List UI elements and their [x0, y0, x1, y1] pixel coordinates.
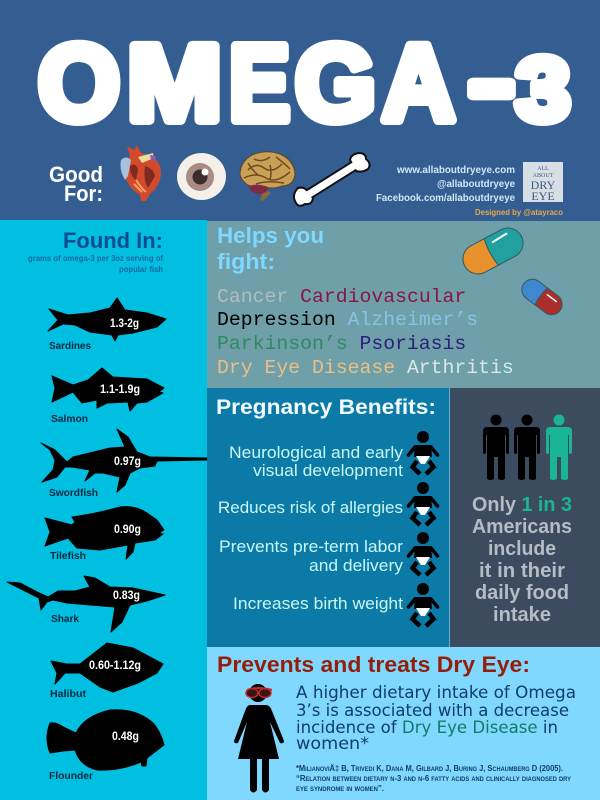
fish: salmon: [51, 368, 164, 425]
heading: found in: Found In:: [63, 228, 163, 253]
panel: pregnancy benefits: [207, 388, 449, 647]
credit: Designed by @atayraco: [475, 207, 563, 217]
title: O: [38, 22, 120, 143]
fish: flounder: [47, 710, 164, 782]
subheading: grams of omega-3 per 3oz serving of: [28, 254, 163, 263]
fish: sardines: [48, 298, 166, 352]
fish: sardines: 1.3-2g: [110, 318, 139, 330]
benefit: neurological: [229, 431, 438, 480]
text: citation: *MilianoviÄ‡ B, Trivedi K, Dana M, Gilbard J, Buring J, Schaumberg D (2005).: [296, 764, 563, 773]
title: -: [468, 19, 515, 140]
icon: three people: [483, 414, 572, 480]
fish: halibut: Halibut: [50, 688, 86, 700]
logo: DRY: [531, 178, 556, 192]
fish: shark: 0.83g: [113, 590, 140, 602]
text: paragraph: women*: [296, 734, 369, 754]
panel: helps you fight: [207, 221, 600, 388]
benefit: pre-term: Prevents pre-term labor: [219, 538, 404, 556]
text: paragraph: 3’s is associated with a decrease: [296, 701, 569, 721]
text: links: @allaboutdryeye: [437, 178, 515, 190]
fish: swordfish: [41, 429, 207, 499]
title: A: [382, 22, 455, 143]
panel: dry eye: [207, 647, 600, 800]
benefit: birth weight: Increases birth weight: [233, 595, 403, 613]
text: paragraph: A higher dietary intake of Omega: [296, 683, 576, 703]
text: links: www.allaboutdryeye.com: [396, 164, 515, 176]
fish: salmon: Salmon: [51, 413, 88, 425]
text: citation: eye syndrome in women”.: [296, 784, 384, 793]
panel: 1 in 3 Americans: [449, 388, 600, 647]
text: conditions list: Parkinson’s Psoriasis: [217, 333, 466, 355]
text: citation: [296, 764, 571, 793]
fish: flounder: Flounder: [49, 770, 93, 782]
benefit: neurological: Neurological and early: [229, 444, 404, 462]
heading: good for: Good: [49, 162, 103, 187]
heading: helps you fight: fight:: [217, 249, 275, 274]
benefit: pre-term: and delivery: [309, 557, 404, 575]
text: only 1 in 3: intake: [493, 603, 551, 626]
fish: sardines: Sardines: [49, 340, 91, 352]
title: E: [229, 22, 290, 143]
panel: found in: [0, 220, 207, 800]
fish: halibut: 0.60-1.12g: [89, 660, 141, 672]
benefit: neurological: visual development: [253, 462, 403, 480]
text: links: Facebook.com/allaboutdryeye: [376, 192, 515, 204]
icon: brain: [240, 152, 295, 201]
icon: eye: [177, 153, 226, 200]
text: only 1 in 3: [472, 493, 572, 626]
title: G: [295, 22, 376, 143]
title: M: [127, 22, 222, 143]
panel: header: [0, 0, 600, 221]
fish: shark: Shark: [51, 613, 79, 625]
fish: swordfish: 0.97g: [114, 456, 141, 468]
fish: tilefish: Tilefish: [50, 550, 86, 562]
text: only 1 in 3: Americans: [472, 515, 572, 538]
heading: helps you fight: Helps you: [217, 223, 324, 248]
text: conditions list: Dry Eye Disease Arthritis: [217, 357, 514, 379]
text: only 1 in 3: daily food: [475, 581, 569, 604]
heading: good for: [49, 162, 103, 206]
fish: shark: [7, 576, 165, 632]
heading: helps you fight: [217, 223, 324, 274]
benefit: birth weight: [233, 583, 438, 626]
text: links: [376, 164, 515, 204]
fish: halibut: [50, 643, 163, 700]
heading: dry eye: Prevents and treats Dry Eye:: [217, 652, 530, 677]
logo: ABOUT: [533, 173, 554, 179]
heading: good for: For:: [64, 181, 103, 206]
title: 3: [516, 39, 570, 139]
icon: woman with sunglasses: [234, 684, 284, 792]
icon: bone: [294, 153, 370, 206]
fish: salmon: 1.1-1.9g: [100, 384, 140, 396]
icon: small capsule: [518, 275, 566, 319]
subheading: [28, 254, 163, 274]
benefit: allergies: [218, 482, 438, 525]
icon: large capsule: [458, 223, 528, 279]
fish: swordfish: Swordfish: [49, 487, 98, 499]
benefit: pre-term: [219, 532, 438, 575]
heading: pregnancy benefits: Pregnancy Benefits:: [216, 395, 436, 419]
text: paragraph: [296, 683, 576, 754]
icon: heart: [120, 145, 161, 201]
logo: EYE: [531, 189, 555, 203]
logo: ALL: [537, 166, 549, 172]
text: paragraph: incidence of Dry Eye Disease in: [296, 718, 558, 738]
fish: flounder: 0.48g: [112, 731, 139, 743]
text: conditions list: [217, 286, 514, 379]
text: only 1 in 3: Only 1 in 3: [472, 493, 572, 516]
text: only 1 in 3: include: [488, 537, 556, 560]
fish: tilefish: [45, 507, 164, 562]
subheading: popular fish: [119, 265, 163, 274]
text: conditions list: Cancer Cardiovascular: [217, 286, 466, 308]
fish: tilefish: 0.90g: [114, 524, 141, 536]
logo: [523, 162, 563, 203]
benefit: allergies: Reduces risk of allergies: [218, 499, 403, 517]
text: only 1 in 3: it in their: [479, 559, 565, 582]
text: conditions list: Depression Alzheimer’s: [217, 309, 478, 331]
text: citation: “Relation between dietary n-3 and n-6 fatty acids and clinically diagnosed dry: [296, 774, 571, 783]
